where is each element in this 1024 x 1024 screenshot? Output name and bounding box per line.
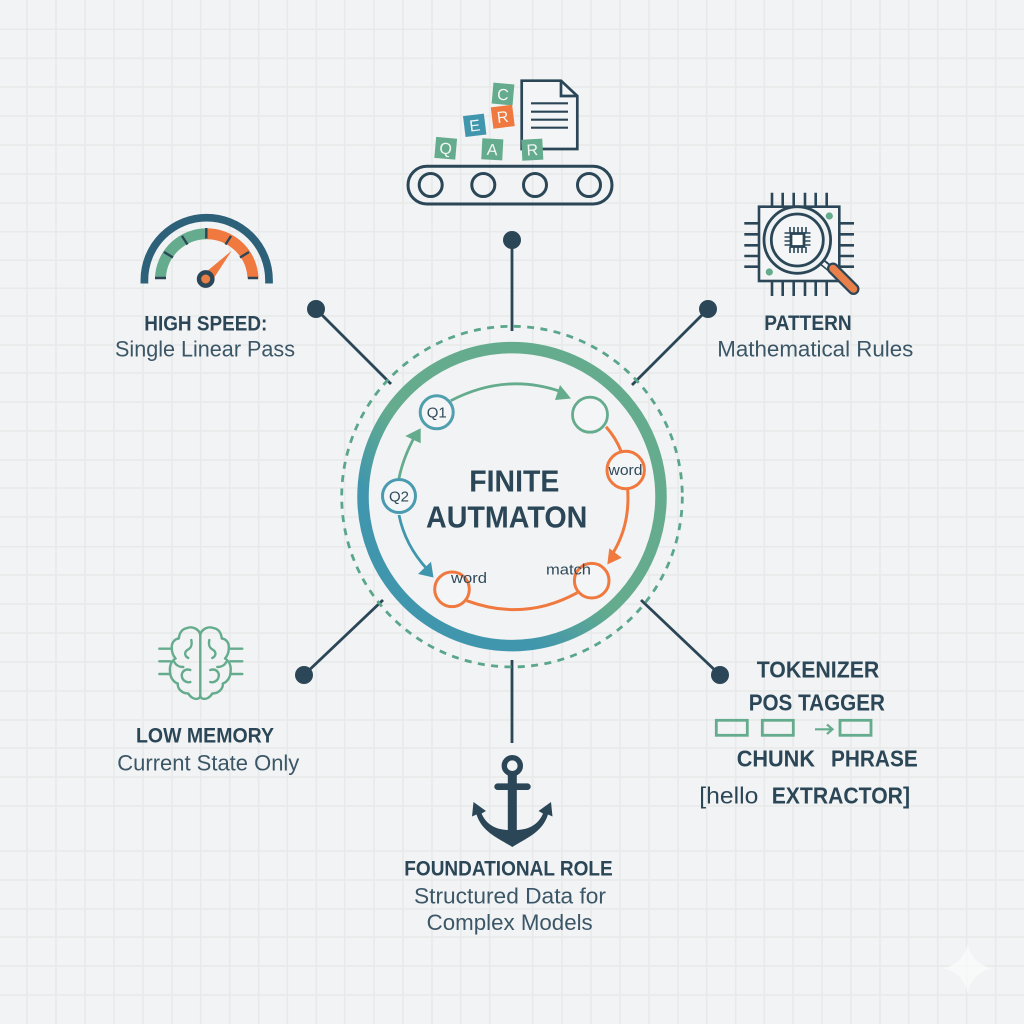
icon: speedometer bbox=[144, 218, 269, 286]
icon: letter tiles bbox=[434, 83, 543, 161]
icon: letter tiles: R bbox=[496, 109, 510, 127]
state match bbox=[546, 562, 609, 598]
spoke: upper right connector bbox=[632, 300, 717, 385]
heading: pattern: PATTERN bbox=[764, 312, 852, 335]
panel: high speed bbox=[115, 218, 295, 362]
heading: chunk: CHUNK bbox=[737, 746, 815, 772]
state Q2 bbox=[382, 480, 416, 512]
title: finite automaton: AUTMATON bbox=[426, 499, 587, 534]
spoke: upper left connector bbox=[307, 300, 391, 384]
title: finite automaton bbox=[426, 464, 587, 534]
heading: low memory: LOW MEMORY bbox=[136, 725, 274, 748]
subtext: structured data: Structured Data for bbox=[414, 883, 606, 908]
spoke: lower left connector bbox=[295, 600, 383, 684]
state Q2: Q2 bbox=[389, 488, 409, 506]
subtext: current state only: Current State Only bbox=[117, 751, 299, 776]
icon: document bbox=[522, 81, 577, 149]
transition: Q1 to top state bbox=[451, 384, 571, 401]
state lower word bbox=[435, 570, 487, 607]
subtext: single linear pass: Single Linear Pass bbox=[115, 337, 295, 362]
transition: top state to word bbox=[606, 427, 621, 451]
spoke: lower right connector bbox=[641, 600, 729, 684]
icon: letter tiles: Q bbox=[439, 140, 453, 159]
subtext: complex models: Complex Models bbox=[427, 910, 593, 935]
heading: extractor: EXTRACTOR] bbox=[772, 782, 910, 808]
state top right bbox=[572, 397, 608, 432]
spoke: bottom connector bbox=[511, 660, 513, 743]
state word: word bbox=[607, 462, 642, 479]
panel: NLP pipeline bbox=[699, 657, 918, 808]
text: hello: [hello bbox=[699, 782, 758, 808]
diagram: token boxes and arrow bbox=[716, 720, 871, 735]
heading: foundational role: FOUNDATIONAL ROLE bbox=[404, 858, 613, 881]
panel: pattern bbox=[717, 193, 913, 362]
panel: foundational role bbox=[404, 758, 613, 935]
state word bbox=[607, 451, 644, 489]
state Q1 bbox=[420, 396, 453, 429]
icon: letter tiles: R bbox=[526, 142, 539, 160]
transition: Q2 to Q1 bbox=[399, 428, 421, 478]
icon: brain bbox=[159, 627, 242, 699]
icon: letter tiles: E bbox=[469, 117, 481, 136]
subtext: mathematical rules: Mathematical Rules bbox=[717, 337, 913, 362]
heading: pos tagger: POS TAGGER bbox=[749, 689, 885, 715]
icon: letter tiles: A bbox=[486, 142, 498, 159]
title: finite automaton: FINITE bbox=[469, 464, 559, 499]
transition: Q2 to lower word bbox=[399, 515, 434, 578]
state Q1: Q1 bbox=[427, 404, 447, 422]
heading: phrase: PHRASE bbox=[831, 746, 918, 772]
panel: finite automaton hub bbox=[342, 326, 682, 667]
transition: word to match bbox=[607, 490, 628, 564]
icon: chip under magnifier bbox=[744, 193, 854, 296]
spoke: top connector bbox=[503, 231, 521, 331]
heading: high speed: HIGH SPEED: bbox=[144, 313, 267, 336]
heading: tokenizer: TOKENIZER bbox=[757, 657, 880, 683]
icon: anchor bbox=[472, 758, 552, 847]
gradient main ring bbox=[363, 348, 661, 646]
icon: corner sparkle bbox=[944, 944, 992, 993]
icon: conveyor belt bbox=[408, 166, 612, 204]
transition: match to lower word bbox=[467, 593, 577, 610]
dashed outer ring bbox=[342, 326, 682, 667]
panel: text to conveyor bbox=[408, 81, 612, 204]
icon: letter tiles: C bbox=[496, 87, 509, 104]
panel: low memory bbox=[117, 627, 299, 776]
state match: match bbox=[546, 562, 591, 578]
state lower word: word bbox=[450, 570, 487, 587]
